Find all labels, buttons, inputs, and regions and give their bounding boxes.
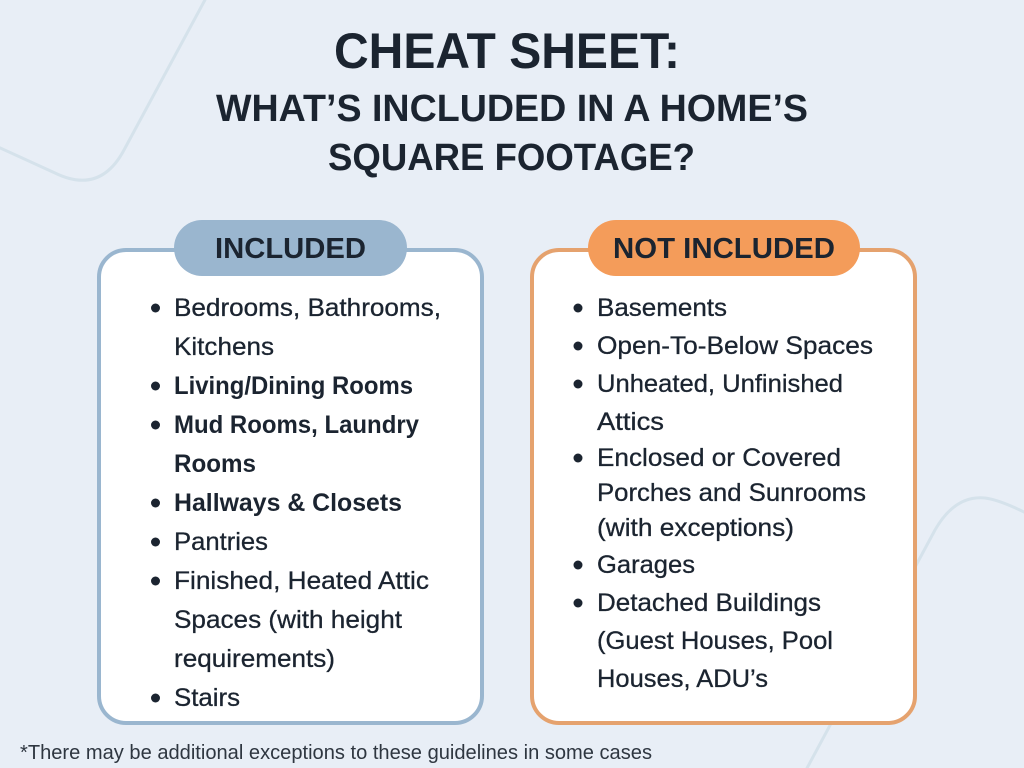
not included heading pill — [588, 220, 860, 276]
not included list: Detached Buildings — [597, 589, 821, 617]
not included list: (Guest Houses, Pool — [597, 627, 833, 655]
panel: included — [99, 220, 482, 723]
footnote: *There may be additional exceptions to these guidelines in some cases — [20, 742, 652, 764]
not included list: Unheated, Unfinished — [597, 370, 843, 398]
title — [216, 23, 808, 179]
included list: Mud Rooms, Laundry — [174, 411, 419, 439]
included list: Bedrooms, Bathrooms, — [174, 294, 441, 322]
not included heading pill: NOT INCLUDED — [613, 233, 835, 265]
not included list — [574, 294, 873, 693]
panel: not included — [532, 220, 915, 723]
not included list: Houses, ADU’s — [597, 665, 768, 693]
title: SQUARE FOOTAGE? — [328, 137, 695, 179]
included list: Pantries — [174, 528, 268, 556]
included list: Hallways & Closets — [174, 489, 402, 517]
included list: Rooms — [174, 450, 256, 478]
not included list: Basements — [597, 294, 727, 322]
included list: Stairs — [174, 684, 240, 712]
not included list: Attics — [597, 408, 664, 436]
not included list: Enclosed or Covered — [597, 444, 841, 472]
included list — [151, 294, 441, 712]
included heading pill — [174, 220, 407, 276]
not included list: Porches and Sunrooms — [597, 479, 866, 507]
included panel border — [99, 250, 482, 723]
included list: Living/Dining Rooms — [174, 372, 413, 400]
included list: Finished, Heated Attic — [174, 567, 429, 595]
included list: requirements) — [174, 645, 335, 673]
not included panel border — [532, 250, 915, 723]
included list: Kitchens — [174, 333, 274, 361]
not included list: Open-To-Below Spaces — [597, 332, 873, 360]
not included list: Garages — [597, 551, 695, 579]
title: WHAT’S INCLUDED IN A HOME’S — [216, 88, 808, 130]
not included list: (with exceptions) — [597, 514, 794, 542]
title: CHEAT SHEET: — [334, 23, 680, 79]
included heading pill: INCLUDED — [215, 233, 366, 265]
included list: Spaces (with height — [174, 606, 402, 634]
